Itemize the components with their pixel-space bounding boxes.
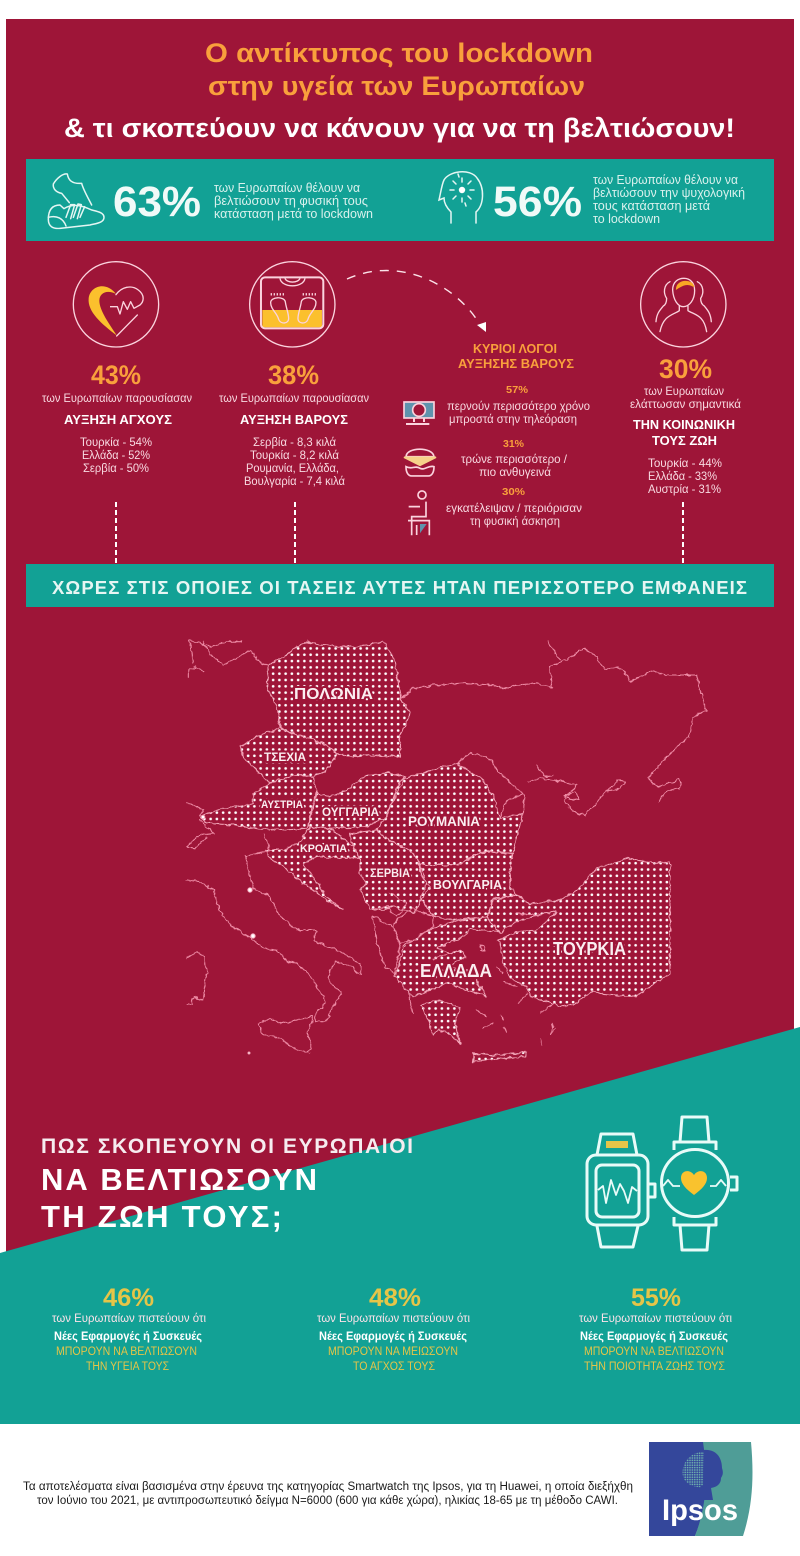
panel: main reasons for weight gain: 57%: [506, 384, 529, 396]
footer note: Τα αποτελέσματα είναι βασισμένα στην έρευνα της κατηγορίας Smartwatch της Ipsos, για τη Huawei, η οποία διεξήχθη: [23, 1481, 633, 1493]
panel: main reasons for weight gain: τη φυσική άσκηση: [470, 514, 560, 528]
stat: 56 percent: τους κατάσταση μετά: [593, 199, 710, 213]
panel: main reasons for weight gain: τρώνε περισσότερο /: [461, 452, 568, 466]
map: city markers: [201, 815, 255, 1054]
stat column: anxiety: ΑΥΞΗΣΗ ΑΓΧΟΥΣ: [64, 413, 173, 427]
title: [64, 38, 735, 143]
stat column: anxiety: [42, 360, 192, 475]
map: country labels: ΡΟΥΜΑΝΙΑ: [408, 813, 480, 829]
heading: how Europeans intend to improve: [41, 1135, 413, 1234]
heading band: countries: ΧΩΡΕΣ ΣΤΙΣ ΟΠΟΙΕΣ ΟΙ ΤΑΣΕΙΣ ΑΥΤΕΣ ΗΤΑΝ ΠΕΡΙΣΣΟΤΕΡΟ ΕΜΦΑΝΕΙΣ: [52, 577, 747, 598]
stat column: social life: Τουρκία - 44%: [648, 456, 722, 470]
stat column: quality of life: Νέες Εφαρμογές ή Συσκευές: [580, 1331, 728, 1343]
stat column: social life: των Ευρωπαίων: [644, 384, 724, 398]
icon: person silhouettes in circle: [641, 262, 726, 347]
title: Ο αντίκτυπος του lockdown: [205, 38, 593, 68]
icon: heart in circle: [73, 262, 159, 347]
stat column: weight: [219, 360, 369, 488]
panel: main reasons for weight gain: περνούν περισσότερο χρόνο: [447, 399, 590, 413]
map: country labels: ΑΥΣΤΡΙΑ: [261, 799, 303, 811]
stat column: health: των Ευρωπαίων πιστεύουν ότι: [52, 1313, 206, 1325]
stat column: social life: ελάττωσαν σημαντικά: [630, 397, 741, 411]
stat column: weight: Τουρκία - 8,2 κιλά: [250, 448, 339, 462]
stat column: anxiety: Σερβία - 50%: [83, 461, 149, 475]
map region: Croatia: [267, 827, 360, 910]
map: country labels: ΤΟΥΡΚΙΑ: [553, 939, 626, 959]
map region: Czechia: [240, 728, 337, 783]
stat column: weight: Σερβία - 8,3 κιλά: [253, 435, 336, 449]
stat: 56 percent: το lockdown: [593, 212, 660, 226]
map region: Turkey: [487, 858, 670, 1007]
stat column: social life: ΤΟΥΣ ΖΩΗ: [652, 434, 717, 448]
map: country labels: ΤΣΕΧΙΑ: [264, 750, 306, 764]
icon: smartwatches: [587, 1117, 737, 1250]
map region: Bulgaria: [420, 852, 517, 920]
title: & τι σκοπεύουν να κάνουν για να τη βελτιώσουν!: [64, 113, 735, 143]
stat column: weight: Ρουμανία, Ελλάδα,: [246, 461, 339, 475]
stat column: anxiety: Τουρκία - 54%: [80, 435, 152, 449]
map: country labels: ΕΛΛΑΔΑ: [420, 961, 492, 981]
map: country labels: ΣΕΡΒΙΑ: [370, 866, 410, 880]
footer note: [23, 1481, 633, 1507]
stat column: quality of life: 55%: [631, 1284, 681, 1312]
map: country labels: ΒΟΥΛΓΑΡΙΑ: [433, 877, 503, 892]
panel: main reasons for weight gain: 31%: [503, 438, 525, 450]
stat: 63 percent: [113, 178, 373, 226]
map region: Hungary: [308, 773, 405, 828]
map region: Crete: [473, 1052, 527, 1062]
map region: Poland: [267, 642, 410, 757]
stat column: weight: 38%: [268, 360, 319, 390]
heading: how Europeans intend to improve: ΠΩΣ ΣΚΟΠΕΥΟΥΝ ΟΙ ΕΥΡΩΠΑΙΟΙ: [41, 1135, 413, 1158]
stat column: anxiety: των Ευρωπαίων παρουσίασαν: [42, 391, 192, 405]
stat column: health: ΤΗΝ ΥΓΕΙΑ ΤΟΥΣ: [86, 1361, 169, 1373]
map: country labels: ΠΟΛΩΝΙΑ: [294, 686, 373, 703]
icon: running shoes: [48, 174, 104, 228]
stat column: health: 46%: [103, 1284, 154, 1312]
map: country labels: [261, 686, 626, 981]
stat column: weight: Βουλγαρία - 7,4 κιλά: [244, 474, 345, 488]
heading band: countries: [26, 564, 774, 607]
panel: main reasons for weight gain: [404, 342, 590, 535]
panel: main reasons for weight gain: μπροστά στην τηλεόραση: [449, 412, 577, 426]
map region: Romania: [377, 763, 523, 865]
stat: 56 percent: βελτιώσουν την ψυχολογική: [593, 186, 745, 200]
icon: television: [404, 402, 434, 424]
stat: 63 percent: βελτιώσουν τη φυσική τους: [214, 194, 368, 208]
stat: 63 percent: 63%: [113, 178, 201, 226]
stat column: anxiety: 43%: [91, 360, 141, 390]
logo: Ipsos: Ipsos: [662, 1494, 738, 1527]
stat column: weight: των Ευρωπαίων παρουσίασαν: [219, 391, 369, 405]
stat column: quality of life: των Ευρωπαίων πιστεύουν ότι: [579, 1313, 732, 1325]
stat column: social life: Αυστρία - 31%: [648, 482, 721, 496]
panel: main reasons for weight gain: ΚΥΡΙΟΙ ΛΟΓΟΙ: [473, 342, 557, 356]
stat column: anxiety: Ελλάδα - 52%: [82, 448, 150, 462]
heading: how Europeans intend to improve: ΤΗ ΖΩΗ ΤΟΥΣ;: [41, 1199, 282, 1234]
icon: bathroom scale in circle: [250, 262, 335, 347]
stat column: stress: ΜΠΟΡΟΥΝ ΝΑ ΜΕΙΩΣΟΥΝ: [328, 1346, 458, 1358]
stat: 56 percent: [493, 173, 745, 226]
map region: Serbia: [350, 830, 430, 913]
stat: 63 percent: κατάσταση μετά το lockdown: [214, 207, 373, 221]
map: dotted countries: [187, 640, 707, 1062]
stat: 63 percent: των Ευρωπαίων θέλουν να: [214, 181, 360, 195]
panel: main reasons for weight gain: 30%: [502, 486, 526, 498]
panel: teal diagonal background: [0, 1027, 800, 1424]
map: country labels: ΚΡΟΑΤΙΑ: [300, 843, 347, 855]
heading: how Europeans intend to improve: ΝΑ ΒΕΛΤΙΩΣΟΥΝ: [41, 1162, 317, 1197]
stat column: social life: [630, 354, 741, 496]
stat column: stress: των Ευρωπαίων πιστεύουν ότι: [317, 1313, 470, 1325]
stat column: weight: ΑΥΞΗΣΗ ΒΑΡΟΥΣ: [240, 413, 348, 427]
map region: Peloponnese: [420, 1000, 460, 1043]
panel: teal stats band: [26, 159, 774, 241]
stat column: social life: ΤΗΝ ΚΟΙΝΩΝΙΚΗ: [633, 418, 735, 432]
stat column: stress: 48%: [369, 1284, 421, 1312]
connector: dashed lines to band: [116, 502, 683, 564]
icon: square smartwatch: [587, 1134, 655, 1247]
map region: Greece north: [395, 917, 498, 997]
arrow: dashed curve to weight reasons: [347, 271, 486, 332]
panel: main reasons for weight gain: πιο ανθυγεινά: [479, 465, 551, 479]
stat column: stress: Νέες Εφαρμογές ή Συσκευές: [319, 1331, 467, 1343]
map region: Austria: [200, 775, 317, 830]
stat column: quality of life: ΜΠΟΡΟΥΝ ΝΑ ΒΕΛΤΙΩΣΟΥΝ: [584, 1346, 724, 1358]
icon: round smartwatch: [662, 1117, 737, 1250]
map: dotted country borders: [200, 642, 670, 1062]
panel: maroon background: [6, 19, 794, 1264]
stat column: quality of life: [579, 1284, 732, 1373]
logo: Ipsos: [649, 1442, 752, 1536]
icon: head with spark: [439, 172, 483, 223]
footer note: τον Ιούνιο του 2021, με αντιπροσωπευτικό δείγμα Ν=6000 (600 για κάθε χώρα), ηλικίας 18-65 με τη μέθοδο CAWI.: [37, 1495, 618, 1507]
stat column: stress: [317, 1284, 470, 1373]
stat column: health: ΜΠΟΡΟΥΝ ΝΑ ΒΕΛΤΙΩΣΟΥΝ: [56, 1346, 197, 1358]
stat column: quality of life: ΤΗΝ ΠΟΙΟΤΗΤΑ ΖΩΗΣ ΤΟΥΣ: [584, 1361, 725, 1373]
stat: 56 percent: 56%: [493, 178, 582, 226]
stat column: stress: ΤΟ ΑΓΧΟΣ ΤΟΥΣ: [353, 1361, 435, 1373]
stat column: social life: Ελλάδα - 33%: [648, 469, 717, 483]
icon: burger: [404, 449, 436, 476]
stat column: social life: 30%: [659, 354, 712, 384]
panel: main reasons for weight gain: εγκατέλειψαν / περιόρισαν: [446, 501, 582, 515]
title: στην υγεία των Ευρωπαίων: [208, 71, 585, 101]
map: country labels: ΟΥΓΓΑΡΙΑ: [322, 805, 379, 819]
map: country outlines: [187, 640, 707, 1053]
panel: main reasons for weight gain: ΑΥΞΗΣΗΣ ΒΑΡΟΥΣ: [458, 357, 575, 371]
stat column: health: Νέες Εφαρμογές ή Συσκευές: [54, 1331, 202, 1343]
stat column: health: [52, 1284, 206, 1373]
icon: seated person: [408, 491, 429, 535]
stat: 56 percent: των Ευρωπαίων θέλουν να: [593, 173, 738, 187]
